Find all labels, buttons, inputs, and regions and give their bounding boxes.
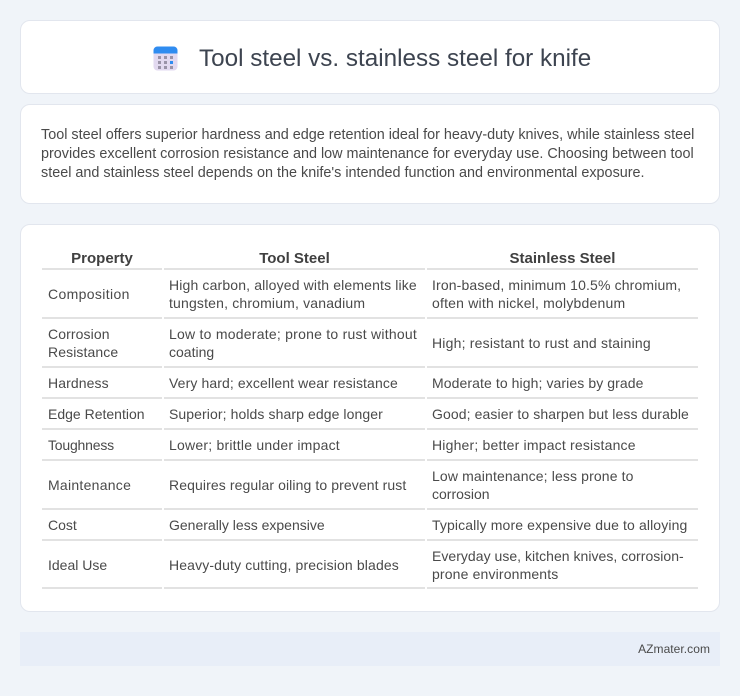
row: cost: Typically more expensive due to alloying <box>432 517 687 533</box>
row: toughness <box>48 437 636 453</box>
footer bar <box>20 632 720 666</box>
comparison table <box>42 250 698 589</box>
summary paragraph: provides excellent corrosion resistance and low maintenance for everyday use. Choosing between tool <box>41 146 694 162</box>
row: composition: tungsten, chromium, vanadium <box>169 295 365 311</box>
row: cost: Cost <box>48 517 77 533</box>
row: hardness: Moderate to high; varies by grade <box>432 375 644 391</box>
header row <box>71 250 615 267</box>
row: ideal use: Everyday use, kitchen knives, corrosion- <box>432 548 684 564</box>
row: corrosion resistance: coating <box>169 344 214 360</box>
panel: summary text <box>20 104 720 204</box>
row: hardness: Hardness <box>48 375 109 391</box>
footer credit: AZmater.com <box>638 642 710 656</box>
row: maintenance: Low maintenance; less prone to <box>432 468 634 484</box>
row: corrosion resistance: Low to moderate; prone to rust without <box>169 326 417 342</box>
row: maintenance <box>48 468 634 502</box>
row: edge retention: Edge Retention <box>48 406 145 422</box>
row: composition: Iron-based, minimum 10.5% chromium, <box>432 277 681 293</box>
row: edge retention: Good; easier to sharpen but less durable <box>432 406 689 422</box>
row: toughness: Lower; brittle under impact <box>169 437 340 453</box>
row: corrosion resistance: Resistance <box>48 344 118 360</box>
heading: Tool steel vs. stainless steel for knife <box>199 45 591 72</box>
row: ideal use: prone environments <box>432 566 558 582</box>
row: hardness: Very hard; excellent wear resistance <box>169 375 398 391</box>
row: hardness <box>48 375 644 391</box>
icon: calendar <box>154 46 178 70</box>
panel: comparison table <box>20 224 720 612</box>
row: maintenance: corrosion <box>432 486 490 502</box>
row: corrosion resistance <box>48 326 651 360</box>
row: corrosion resistance: High; resistant to rust and staining <box>432 335 651 351</box>
row: composition: High carbon, alloyed with elements like <box>169 277 417 293</box>
row: cost <box>48 517 687 533</box>
row: toughness: Toughness <box>48 437 114 453</box>
summary paragraph <box>41 126 694 181</box>
row: ideal use: Ideal Use <box>48 557 107 573</box>
header row: Tool Steel <box>259 250 330 267</box>
row: maintenance: Requires regular oiling to prevent rust <box>169 477 406 493</box>
summary paragraph: Tool steel offers superior hardness and edge retention ideal for heavy-duty knives, while stainless steel <box>41 126 694 142</box>
row: edge retention <box>48 406 689 422</box>
row: edge retention: Superior; holds sharp edge longer <box>169 406 383 422</box>
row: toughness: Higher; better impact resistance <box>432 437 636 453</box>
row: composition: Composition <box>48 286 130 302</box>
row: maintenance: Maintenance <box>48 477 131 493</box>
row: ideal use: Heavy-duty cutting, precision blades <box>169 557 399 573</box>
row: corrosion resistance: Corrosion <box>48 326 110 342</box>
header row: Stainless Steel <box>510 250 615 267</box>
row: ideal use <box>48 548 684 582</box>
row: composition: often with nickel, molybdenum <box>432 295 625 311</box>
row: composition <box>48 277 681 311</box>
panel: title <box>20 20 720 94</box>
summary paragraph: steel and stainless steel depends on the knife's intended function and environmental exposure. <box>41 165 645 181</box>
row: cost: Generally less expensive <box>169 517 325 533</box>
header row: Property <box>71 250 133 267</box>
